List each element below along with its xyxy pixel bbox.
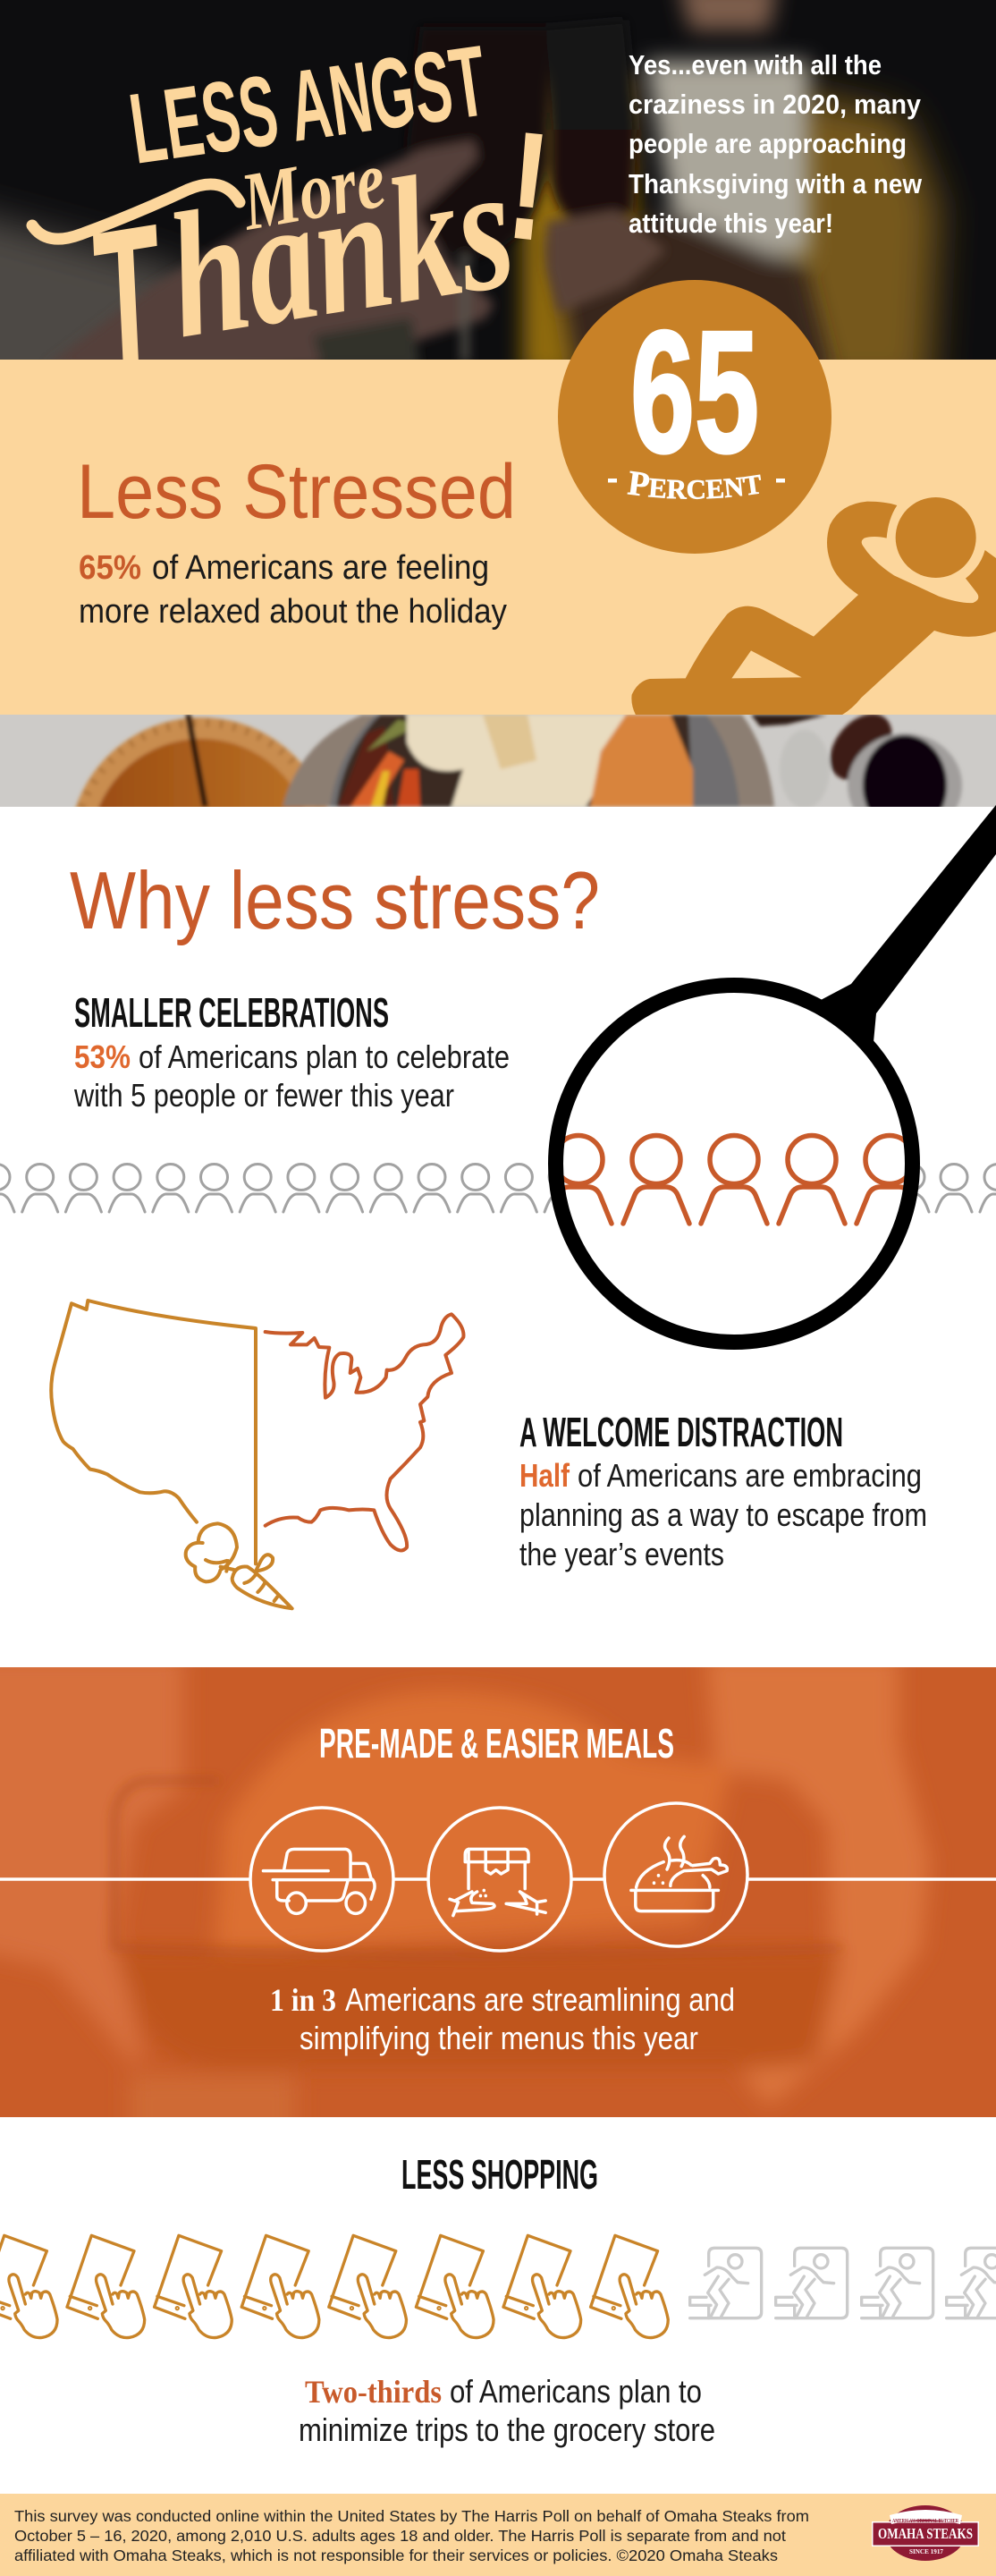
text block: intro: Yes...even with all the (629, 49, 882, 80)
title line: thanks: T (77, 182, 183, 407)
plate (283, 715, 774, 807)
text block: two-thirds of americans: minimize trips to the grocery store (299, 2411, 715, 2448)
text block: two-thirds of americans: of Americans plan to (450, 2373, 702, 2410)
text block: a welcome distraction: planning as a way to escape from (519, 1496, 927, 1533)
text block: two-thirds of americans (299, 2373, 715, 2448)
wine glass (751, 715, 827, 726)
panel: header photo of wine toast (0, 0, 996, 360)
subheading: smaller celebrations: SMALLER CELEBRATIONS (74, 989, 389, 1036)
text block: smaller celebrations: with 5 people or fewer this year (73, 1077, 454, 1114)
icon: box in hands (428, 1808, 571, 1951)
heading: why less stress: Why less stress? (70, 856, 600, 946)
logo: omaha steaks: AMERICA’S ORIGINAL BUTCHER (892, 2518, 958, 2524)
heading: less shopping: LESS SHOPPING (401, 2151, 598, 2198)
title: less angst more thanks (32, 24, 557, 407)
text block: two-thirds of americans: Two-thirds (305, 2374, 442, 2410)
label: percent: PERCENT (628, 470, 762, 499)
panel: footer (0, 2494, 996, 2576)
icon row: delivery, box and turkey circles (0, 1803, 996, 1951)
text block: intro (629, 49, 923, 239)
text block: a welcome distraction: Half (519, 1457, 570, 1494)
text block: a welcome distraction: the year’s events (519, 1536, 724, 1572)
number: 65: 65 (630, 295, 759, 489)
logo: omaha steaks: SINCE 1917 (909, 2547, 943, 2555)
text block: survey methodology (14, 2507, 809, 2564)
text block: survey methodology: October 5 – 16, 2020, among 2,010 U.S. adults ages 18 and older. The Harris Poll is separate from and not (14, 2527, 786, 2545)
text block: intro: craziness in 2020, many (629, 89, 922, 120)
title exclamation mark: ! (500, 99, 557, 274)
icon: delivery truck (250, 1808, 393, 1951)
text block: 1 in 3 americans: Americans are streamlining and (345, 1981, 735, 2018)
photo strip: thanksgiving food (0, 715, 996, 807)
heading: less stressed: Less Stressed (77, 449, 516, 535)
heading: pre-made and easier meals: PRE-MADE & EASIER MEALS (319, 1720, 674, 1767)
icon row: grey exit signs (690, 2248, 996, 2318)
icon: relaxed reclining figure (631, 497, 996, 718)
callout: 65 percent circle (558, 280, 831, 554)
text block: 65 percent of americans: more relaxed about the holiday (79, 593, 507, 631)
text block: 65 percent of americans: of Americans are feeling (152, 549, 489, 587)
icon: united states map with broccoli and carrot (51, 1301, 463, 1608)
text block: 1 in 3 americans: simplifying their menus this year (300, 2020, 698, 2056)
text block: 1 in 3 americans (270, 1981, 735, 2056)
text block: intro: Thanksgiving with a new (629, 168, 923, 199)
panel: less stressed cream band (0, 360, 996, 715)
text block: smaller celebrations: 53% (74, 1038, 131, 1075)
logo: omaha steaks (872, 2505, 979, 2561)
text block: smaller celebrations (73, 989, 510, 1114)
text block: a welcome distraction: of Americans are embracing (578, 1457, 922, 1494)
text block: intro: people are approaching (629, 128, 907, 159)
icon row: grey people (0, 1165, 996, 1212)
text block: smaller celebrations: of Americans plan to celebrate (139, 1038, 510, 1075)
text block: 65 percent of americans: 65% (79, 549, 141, 587)
text block: survey methodology: This survey was conducted online within the United States by The Harris Poll on behalf of Omaha Steaks from (14, 2507, 809, 2525)
title line: more: More (233, 132, 392, 248)
title swash (32, 184, 240, 239)
text block: 65 percent of americans (79, 549, 507, 631)
icon: magnifying glass with five people (545, 805, 996, 1342)
text block: survey methodology: affiliated with Omaha Steaks, which is not responsible for their services or policies. ©2020 Omaha Steaks (14, 2546, 778, 2564)
title line: thanks: hanks (156, 127, 526, 376)
icon: roast turkey (604, 1803, 747, 1946)
panel: pre-made meals turkey photo (0, 1655, 996, 2147)
text block: intro: attitude this year! (629, 208, 833, 239)
text block: 1 in 3 americans: 1 in 3 (270, 1982, 336, 2018)
icon row: phone tapping hands (0, 2235, 668, 2338)
text block: a welcome distraction (519, 1409, 927, 1572)
pie (69, 715, 333, 982)
